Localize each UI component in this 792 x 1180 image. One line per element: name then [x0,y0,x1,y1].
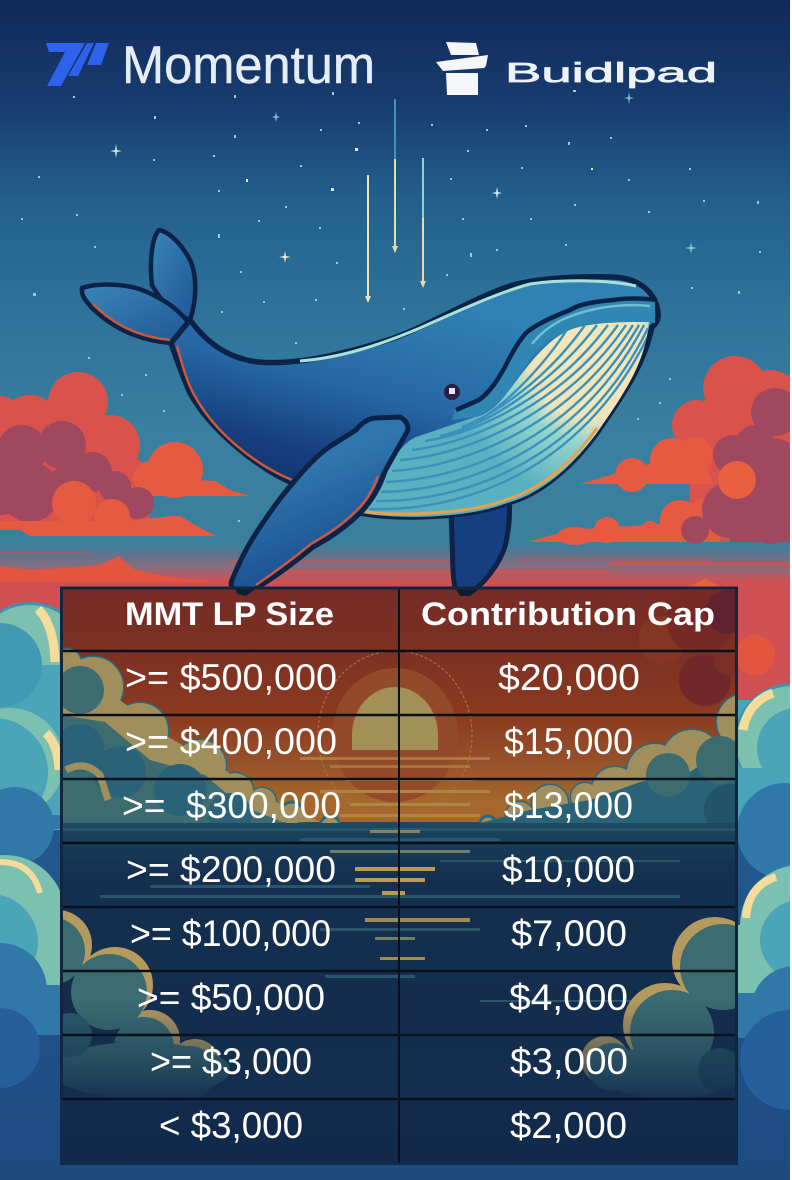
whale front flipper [231,417,408,595]
stars [21,90,761,522]
margin cloud lower left [0,855,65,1088]
row 300,000 [122,785,633,826]
muted cloud upper right [478,694,735,823]
muted red cloud in table [638,590,735,706]
whale back highlight [300,281,636,361]
row under 3,000 [159,1105,627,1146]
row 400,000: $15,000 [504,721,633,762]
row 500,000 [125,657,640,698]
flipper tip in table [235,587,258,596]
row 50,000 [137,977,628,1018]
shooting stars [365,99,426,303]
right edge sliver [790,0,792,1180]
whale eye [444,384,460,400]
whale body [171,277,658,517]
margin cloud upper left [0,602,88,865]
muted sun and rings [300,651,490,819]
Buidlpad logo [436,42,717,95]
row 400,000 [125,721,633,762]
muted cloud lower right [582,917,735,1093]
table grid lines [60,587,738,1163]
row 200,000: $10,000 [502,849,635,890]
muted sea reflections [62,828,736,1002]
whale belly with grooves [362,322,650,517]
row 50,000: $4,000 [509,977,628,1018]
row 3,000 [150,1041,628,1082]
whale fluke rim light [93,304,170,340]
table header [125,596,715,632]
Momentum logo [46,36,375,95]
row 50,000: >= $50,000 [137,977,325,1018]
table header: MMT LP Size [125,596,334,632]
whale upper lip [452,298,655,420]
muted cloud lower left [63,910,230,1093]
margin cloud lower right [738,865,792,1110]
whale flipper rim [256,476,378,585]
row 3,000: >= $3,000 [150,1041,312,1082]
row 500,000: $20,000 [498,657,640,698]
lower fade over clouds [62,1000,736,1100]
table backdrop [60,587,738,1165]
whale body rim light [177,346,292,480]
row under 3,000: < $3,000 [159,1105,303,1146]
row 100,000: $7,000 [511,913,627,954]
horizon red band [0,552,792,592]
row 300,000: $13,000 [504,785,633,826]
margin cloud upper right [734,635,792,879]
whale left fluke [82,285,195,343]
row under 3,000: $2,000 [510,1105,627,1146]
row 200,000 [126,849,635,890]
whale belly rim [366,428,597,514]
whale [82,230,658,595]
Buidlpad wordmark: Buidlpad [505,57,717,88]
Momentum wordmark: Momentum [122,36,375,95]
row 100,000: >= $100,000 [130,913,331,954]
sparkle stars [110,92,697,263]
Momentum mark [46,43,109,86]
whale rear flipper [451,500,510,595]
row 300,000: >= $300,000 [122,785,341,826]
red clouds right [527,356,792,545]
row 200,000: >= $200,000 [126,849,336,890]
row 100,000 [130,913,627,954]
Buidlpad mark [436,42,488,95]
row 400,000: >= $400,000 [125,721,337,762]
data table [60,586,738,1165]
row 500,000: >= $500,000 [125,657,337,698]
red clouds left [0,372,250,536]
whale upper fluke [151,230,195,320]
table header: Contribution Cap [421,596,715,632]
whale mouth line [456,298,657,410]
row 3,000: $3,000 [510,1041,628,1082]
rear flipper tip in table [455,587,482,596]
muted cloud upper left [53,649,340,837]
whale lip highlight [532,305,650,344]
